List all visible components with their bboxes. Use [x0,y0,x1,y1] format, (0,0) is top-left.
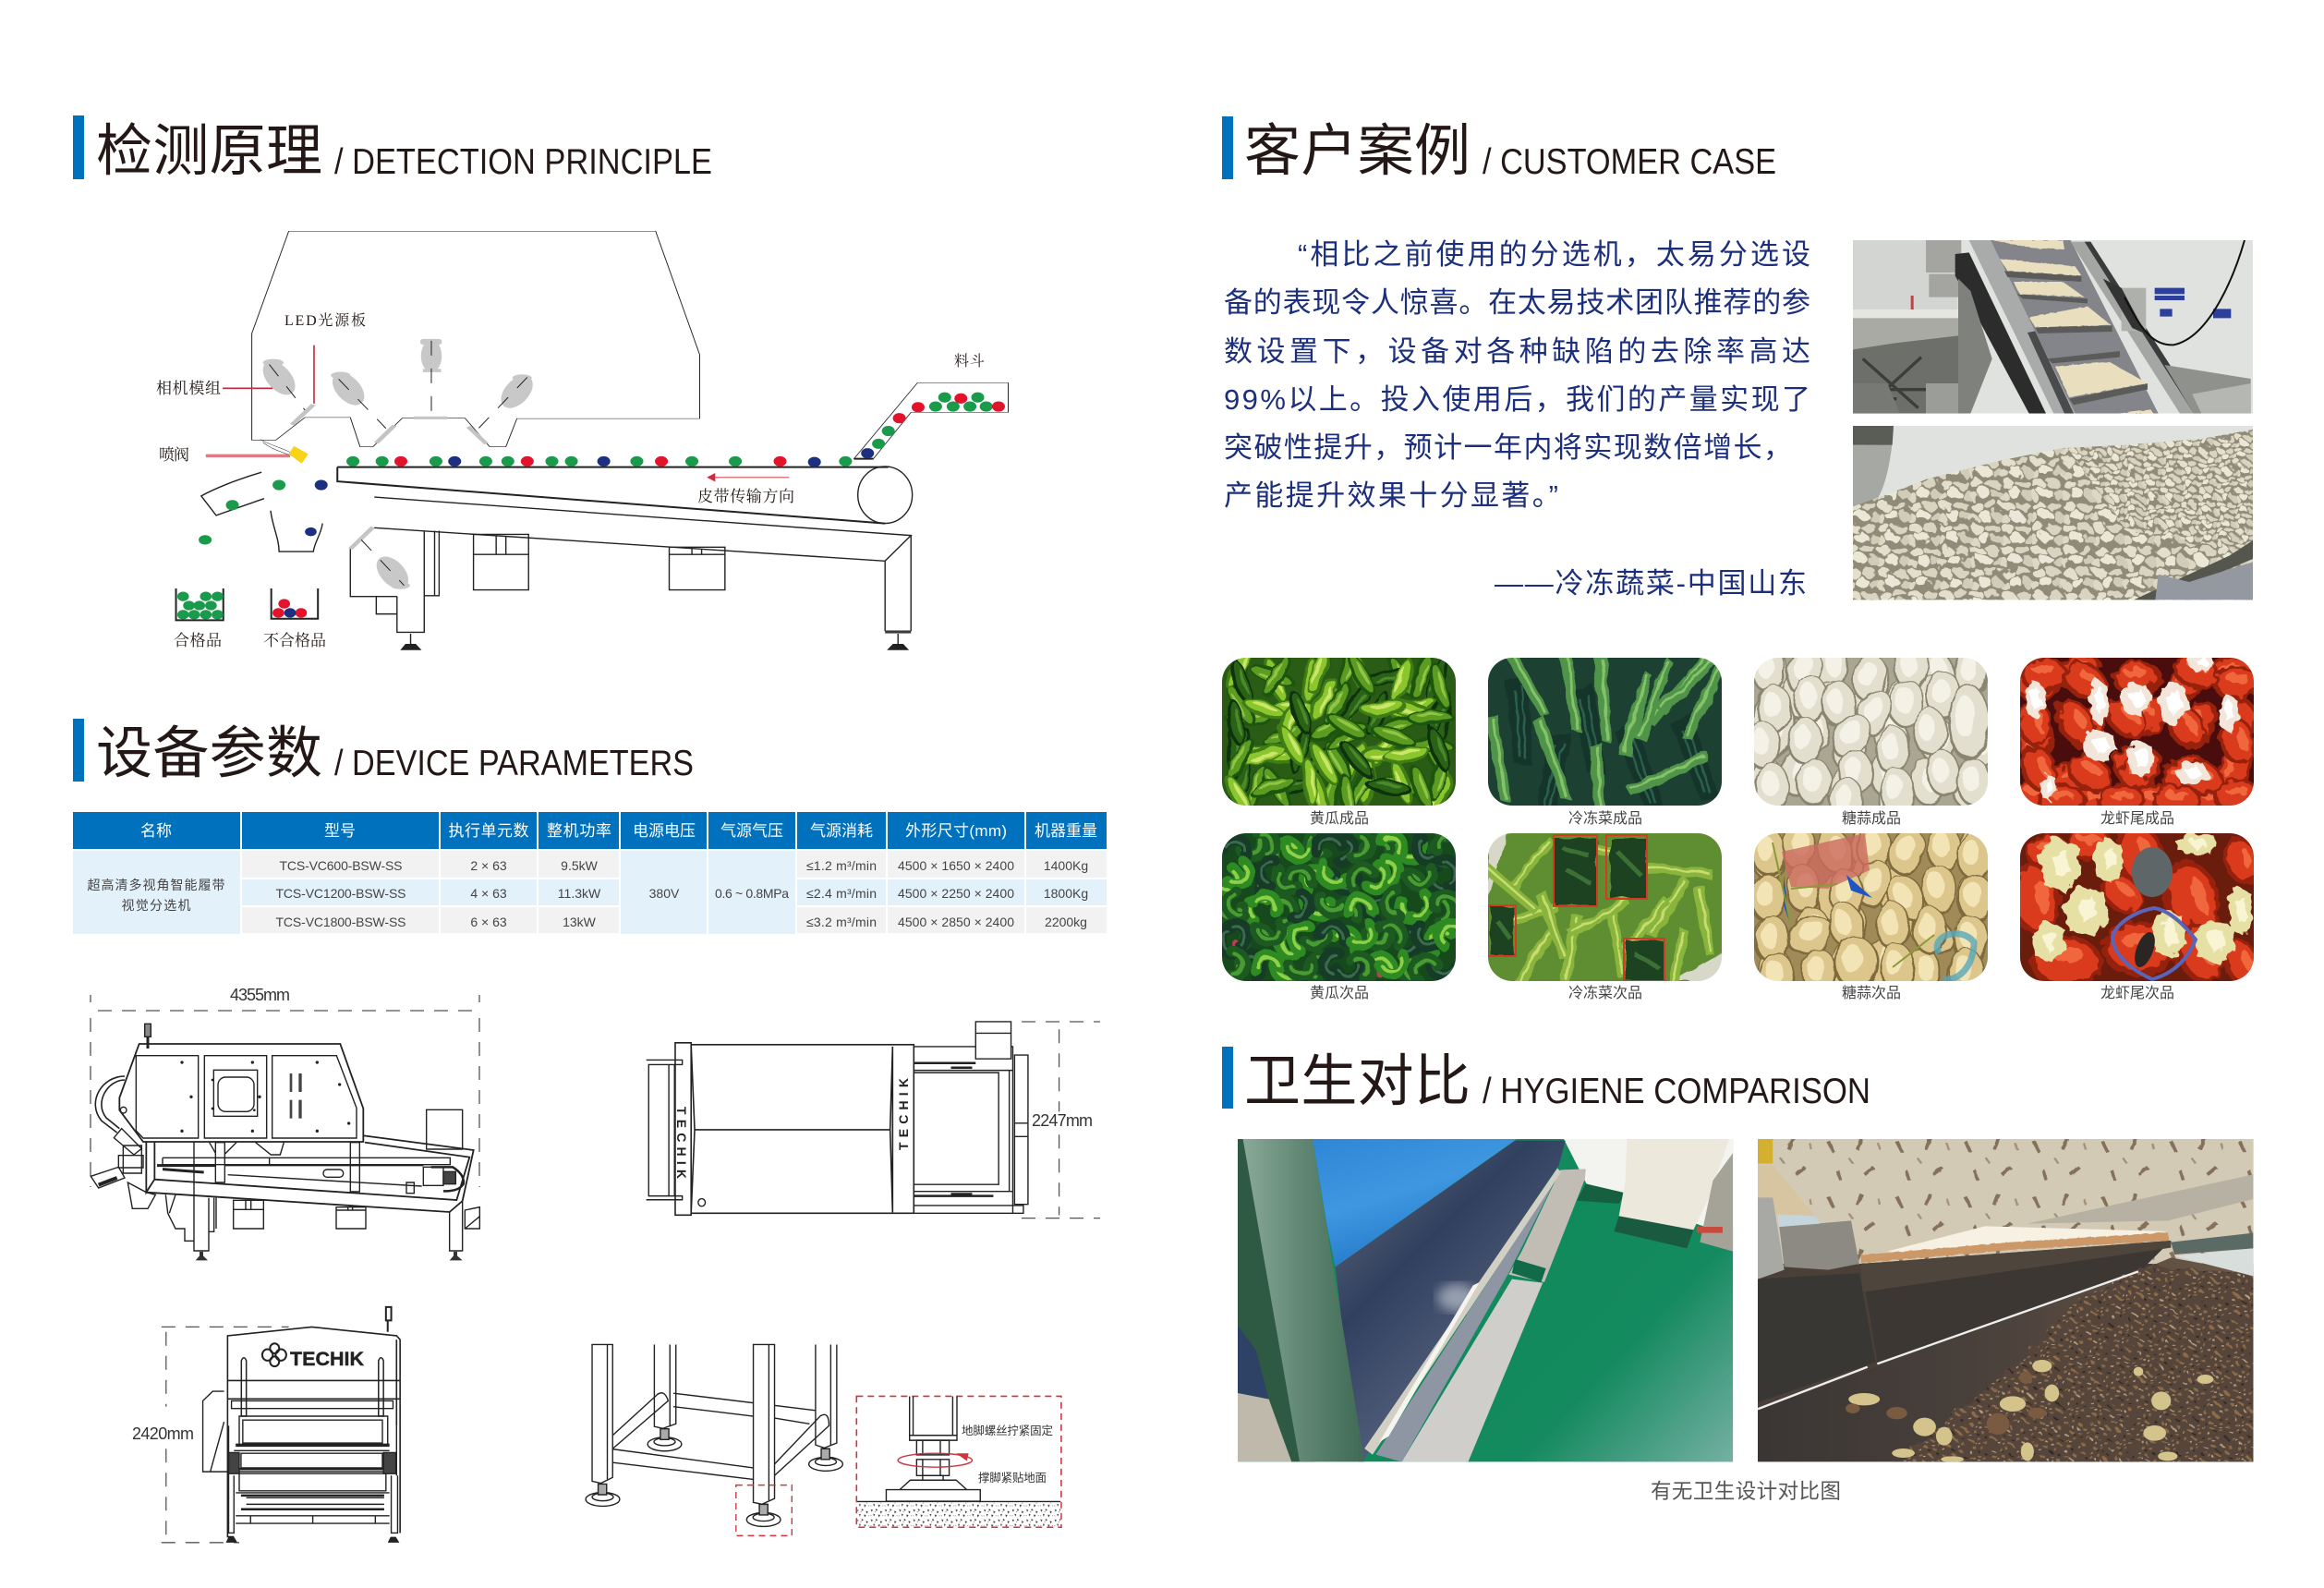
tile captions: 冷冻菜成品 [1568,810,1642,827]
food tile: defective frozen vegetable [1488,833,1722,981]
beacon [145,1024,151,1036]
table text: 视觉分选机 [122,898,190,913]
feet [225,1537,399,1543]
white wall [1564,1139,1733,1227]
quote attribution: ——冷冻蔬菜-中国山东 [1495,567,1807,600]
table text: 1800Kg [1044,886,1088,901]
table text: 超高清多视角智能履带 [87,878,225,892]
dimension lines [162,1327,289,1543]
blue balls [284,448,874,618]
dirty belt underside [1750,1134,2272,1264]
table: device parameters [73,812,1107,934]
table header: 整机功率 [547,822,611,840]
steel corner plate [2134,540,2253,600]
diagram: detection principle [156,231,1008,650]
table body [1853,318,1958,349]
debris field [1881,1267,2272,1473]
garlic clumps [1992,240,2154,414]
table text: 4500 × 1650 × 2400 [898,858,1014,873]
foot inset [910,1396,957,1440]
steel sheet [1336,1141,1566,1461]
machine feet [400,644,909,650]
sidewall band [1861,1241,2171,1363]
photo caption: 有无卫生设计对比图 [1651,1480,1841,1503]
red leader lines [206,345,789,478]
customer quote: “相比之前使用的分选机，太易分选设 [1298,238,1810,271]
upper housing [227,1327,400,1537]
tile captions [1310,810,2174,1001]
tile captions: 冷冻菜次品 [1568,985,1642,1001]
frame [146,1135,474,1212]
logo mark [262,1343,286,1366]
skirting [1577,1183,1626,1204]
beacon [386,1307,392,1332]
handles [241,1358,383,1416]
table header: 执行单元数 [449,822,528,840]
gap highlight [1758,1271,2138,1409]
table text: 1400Kg [1044,858,1088,873]
foot labels: 地脚螺丝拧紧固定 [962,1424,1053,1437]
wall shade [1853,240,1957,311]
heading: detection principle: 检测原理 [96,104,322,187]
valve hoses [260,440,290,455]
table text: 13kW [563,915,597,929]
top right steel [2171,1233,2253,1255]
fasteners [180,1061,350,1133]
string contaminant [1773,842,1934,967]
left post [1758,1197,1785,1279]
drive box [975,1022,1011,1059]
wall signs [2155,288,2231,318]
garlic pieces [1848,1360,2213,1462]
heading: detection principle [73,104,712,187]
blue plastic contaminant [1784,875,1872,921]
vertical logo left: TECHIK [674,1107,689,1179]
tank [2164,365,2251,414]
customer quote: 备的表现令人惊喜。在太易技术团队推荐的参 [1224,286,1810,319]
yellow air valve [289,446,309,464]
channel upper [1508,1169,1586,1282]
tile captions: 糖蒜成品 [1842,810,1901,827]
table text: ≤2.4 m³/min [806,886,877,901]
flights [2004,271,2148,405]
white belt area [1878,426,2253,497]
drawing: machine foot detail: 撑脚紧贴地面 [978,1471,1047,1485]
crumb line [1861,1232,2170,1263]
diagram labels: 喷阀 [159,446,189,464]
defect markers [1488,835,1664,981]
drawing: machine foot detail [586,1344,1061,1535]
ground texture [857,1503,1060,1526]
cross bars [610,1393,829,1479]
table text: 380V [649,886,680,901]
drawing: top view [647,1022,1100,1218]
dimension 2247mm: 2247mm [1032,1111,1093,1130]
red dashed callouts [736,1485,792,1535]
inner rail [1969,240,2076,414]
conveyor and frame [337,459,913,644]
table text: 4 × 63 [470,886,507,901]
heading: hygiene comparison: / HYGIENE COMPARISON [1483,1072,1870,1111]
dark defect spot upper [2132,847,2173,897]
camera sight lines [270,341,527,586]
tile captions: 糖蒜次品 [1842,985,1901,1001]
table body cells [73,851,1107,934]
dimension lines [1022,1022,1100,1218]
floor base [1758,1257,2253,1461]
purple circle marker [2112,908,2196,979]
teal contaminant [1937,934,1974,979]
heading: customer case: / CUSTOMER CASE [1483,142,1776,182]
striped edge [1758,1165,1815,1216]
cameras [257,339,539,591]
food tile: defective crayfish tails [2020,833,2254,981]
photo: hygienic design [1238,1139,1733,1461]
rotation arrow [898,1453,972,1467]
vents [290,1073,302,1119]
hose [95,1076,125,1133]
food tile: good frozen vegetable [1488,658,1722,806]
logo text: TECHIK [290,1349,364,1370]
table text: ≤1.2 m³/min [806,858,877,873]
cabinet base [1614,1216,1693,1248]
blue belt [1313,1139,1517,1267]
conveyor belt [1991,240,2159,414]
table text: 2 × 63 [470,858,507,873]
left box [1758,1273,1876,1402]
table text: 6 × 63 [470,915,507,929]
table text: 4500 × 2250 × 2400 [898,886,1014,901]
photo: garlic on inclined conveyor [1853,240,2253,414]
perforated band [2027,1174,2253,1224]
table header [73,812,1107,849]
tile captions: 龙虾尾次品 [2100,985,2174,1001]
outfeed chutes [91,1129,155,1208]
cabinet [1619,1139,1729,1230]
main body [675,1043,914,1215]
right rail [2071,242,2194,414]
diagram labels [156,312,985,649]
belt direction arrowhead [707,473,715,481]
back legs [654,1344,837,1448]
bracket [1779,1220,1859,1270]
diagram labels: 皮带传输方向 [697,488,794,505]
table header: 电源电压 [633,822,696,840]
table text: ≤3.2 m³/min [806,915,877,929]
customer quote: 突破性提升，预计一年内将实现数倍增长， [1224,431,1792,464]
photo: garlic pile on belt [1853,426,2253,600]
heading: hygiene comparison: 卫生对比 [1244,1035,1471,1117]
table text: 0.6 ~ 0.8MPa [715,886,789,901]
drawing: front view [132,1307,400,1543]
table text: 9.5kW [561,858,599,873]
black cable [2124,240,2245,345]
photo: non-hygienic design [1750,1134,2272,1473]
machine line work and balls [176,231,1008,650]
heading: hygiene comparison [1222,1035,1870,1117]
food tile: good garlic [1754,658,1988,806]
heading: device parameters: / DEVICE PARAMETERS [334,744,694,783]
tile captions: 黄瓜次品 [1310,985,1369,1001]
diagram labels: 相机模组 [156,380,221,397]
table header: 名称 [140,822,172,840]
bright rail [1364,1169,1561,1455]
rear bracket [465,1207,479,1229]
reject chutes and bins [176,472,322,620]
red handle [1911,296,1914,309]
feed chute [853,382,1008,459]
vertical logo right: TECHIK [896,1078,911,1150]
tile captions: 龙虾尾成品 [2100,810,2174,827]
drawing: side view [91,986,479,1260]
cabinet [119,1044,363,1142]
table text: TCS-VC600-BSW-SS [279,858,403,873]
heading: customer case: 客户案例 [1244,104,1471,187]
green floor [1467,1227,1733,1461]
drive motor [423,1167,443,1185]
red balls [272,394,1005,618]
heading: detection principle: / DETECTION PRINCIPLE [334,142,712,182]
side cover [203,1391,229,1472]
table header: 外形尺寸(mm) [905,822,1007,840]
upper frame [1926,240,1961,297]
diagram labels: 不合格品 [263,632,326,649]
light source bars [292,405,487,549]
dark defect spot lower [2135,932,2155,967]
front panels [232,1400,393,1523]
brown bits [1846,1372,2046,1435]
dark green panel [1238,1139,1314,1461]
table top [1853,309,1958,311]
corner yellow [1758,1139,1773,1164]
hood outline [252,231,699,447]
legs [229,1425,397,1533]
table text: 4500 × 2850 × 2400 [898,915,1014,929]
channel lower strip [1402,1279,1543,1461]
food tile: defective cucumbers [1222,833,1456,981]
heading: customer case [1222,104,1776,187]
machine understructure [1853,335,1958,414]
dark motor and box [2122,288,2146,331]
right post [1700,1153,1733,1252]
blue window [1778,1215,1820,1227]
diagram labels: 合格品 [174,632,222,649]
table text: 11.3kW [558,886,601,901]
customer quote: 数设置下，设备对各种缺陷的去除率高达 [1224,335,1810,368]
pale glow [1887,1226,2168,1255]
dimension 2420mm: 2420mm [132,1424,194,1443]
green notch [1512,1259,1546,1282]
feet [586,1429,842,1526]
customer quote: 产能提升效果十分显著。” [1224,479,1558,512]
table header: 机器重量 [1035,822,1097,840]
table text [87,858,1088,929]
table header: 气源气压 [720,822,783,840]
table text: TCS-VC1800-BSW-SS [275,915,406,929]
handle [647,1060,683,1200]
table text: 2200kg [1045,915,1087,929]
channel side [1375,1173,1559,1461]
table header: 型号 [324,822,356,840]
food tile: good cucumbers [1222,658,1456,806]
beige floor [1238,1393,1291,1461]
table header: 气源消耗 [810,822,873,840]
dimension 4355mm: 4355mm [230,986,290,1004]
green post [1243,1139,1364,1461]
diagram labels: 料斗 [954,353,985,370]
machine at top left [1853,445,1892,506]
table text: TCS-VC1200-BSW-SS [275,886,406,901]
support boxes [234,1200,263,1229]
feet [196,1252,463,1260]
green balls [177,393,993,620]
food tile: defective garlic [1754,833,1988,981]
customer quote: 99%以上。投入使用后，我们的产量实现了 [1224,383,1810,416]
diagram labels: LED光源板 [284,312,366,329]
width dimension lines [91,995,479,1187]
heading: device parameters [73,707,694,789]
front legs [754,1344,775,1504]
conveyor section [914,1047,1023,1213]
navy lower left [1238,1326,1269,1400]
tile captions: 黄瓜成品 [1310,810,1369,827]
food tile: good crayfish tails [2020,658,2254,806]
red plastic contaminant [1782,833,1870,889]
customer quote [1224,238,1810,600]
chain side [1955,252,2046,414]
heading: device parameters: 设备参数 [96,707,322,789]
